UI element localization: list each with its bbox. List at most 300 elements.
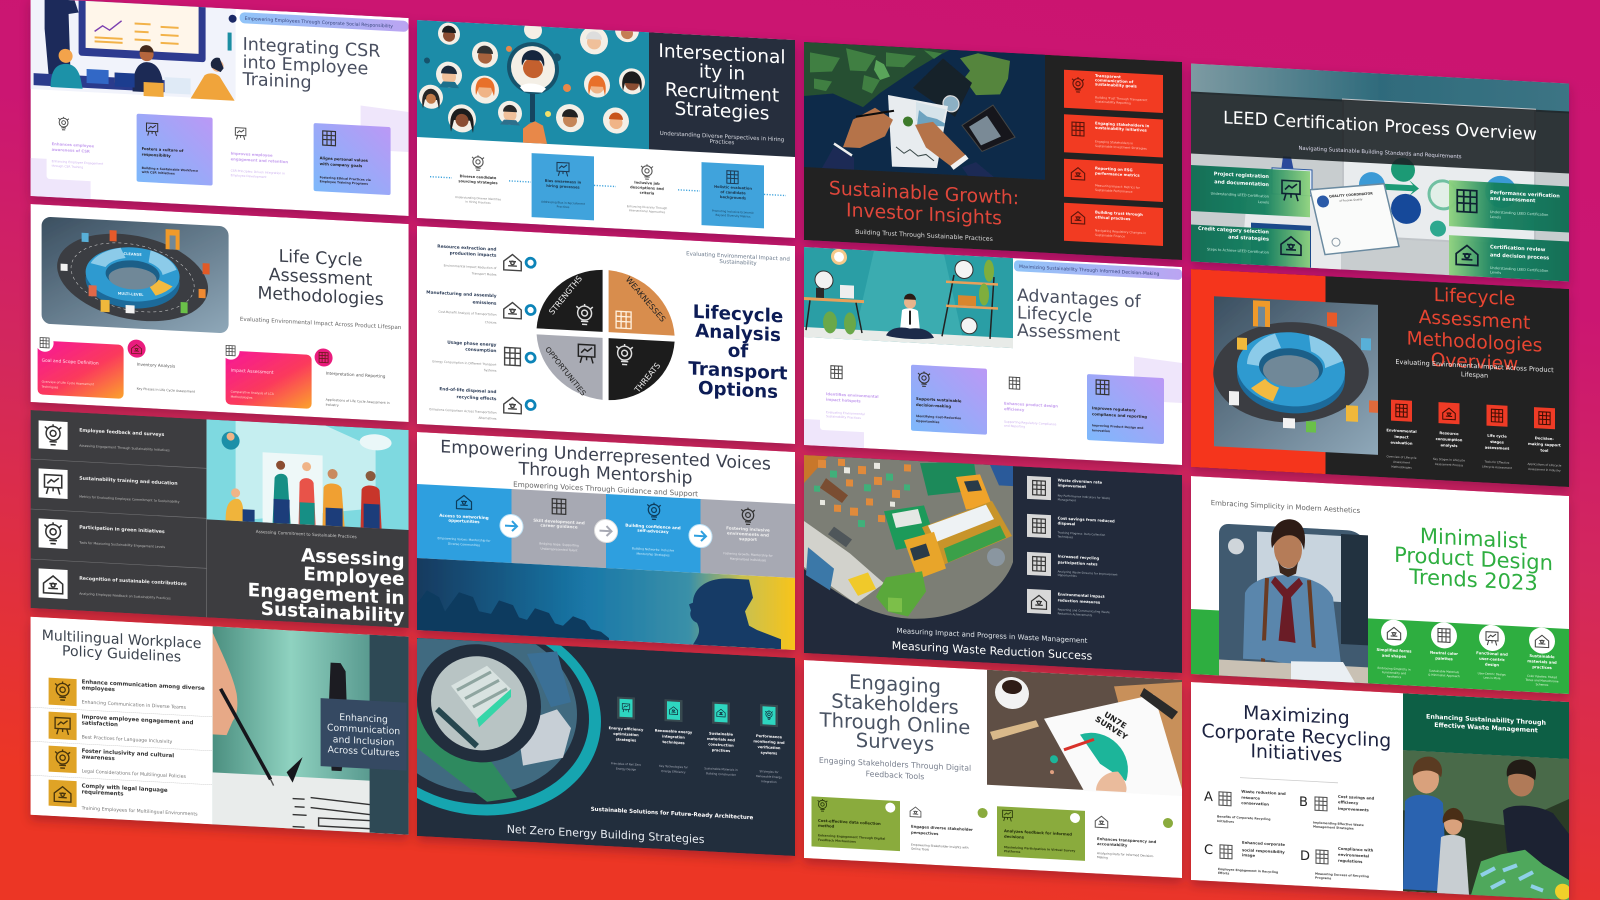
card: hotspots: Evaluating Environmental xyxy=(826,410,865,416)
title: Transport xyxy=(688,358,788,385)
metric: diversion xyxy=(1027,476,1110,504)
title panel xyxy=(649,32,795,157)
strategy: materials: Sustainable xyxy=(709,731,733,737)
card: impact xyxy=(222,341,312,409)
card: transparent communication xyxy=(1064,70,1163,113)
card: responsibility: Building a Sustainable Workforce xyxy=(142,166,198,173)
image: diverse faces xyxy=(417,7,649,149)
title: Employee xyxy=(303,564,405,590)
item: decision: Decision- xyxy=(1535,436,1554,441)
item D: Measuring Success of Recycling xyxy=(1315,872,1369,878)
card: interpretation: Applications of Life Cycle Assessment in xyxy=(326,398,390,405)
illustration: meditating man xyxy=(804,247,1013,348)
subtitle: Sustainable Solutions for Future-Ready Architecture xyxy=(591,807,754,821)
title: Sustainability xyxy=(261,599,405,627)
item: resource: consumption xyxy=(1436,437,1463,442)
metric: diversion: improvement xyxy=(1058,482,1086,489)
trend: sustainable: Tones and Monochrome xyxy=(1524,678,1559,683)
card: values: Employee Training Programs xyxy=(320,179,368,186)
item: end of life: Alternatives xyxy=(478,416,497,421)
step: sourcing xyxy=(455,154,502,205)
subtitle: Empowering Voices Through Guidance and Support xyxy=(513,480,698,498)
step: bias: Bias awareness in xyxy=(545,179,582,185)
title band xyxy=(1191,92,1569,174)
card: data collection: Cost-effective data collection xyxy=(818,818,881,826)
strategy: performance: systems xyxy=(761,751,777,756)
step: holistic: Beyond Diversity Metrics xyxy=(716,213,751,219)
metric: recycling: Analyzing Waste Streams for Improvement xyxy=(1058,569,1118,577)
step: inclusive: criteria xyxy=(640,191,655,196)
item: communication xyxy=(48,678,204,709)
item C: social responsibility xyxy=(1242,847,1285,854)
card: awareness: Enhances employee xyxy=(52,141,94,148)
step: inclusive xyxy=(627,163,667,214)
item B: B xyxy=(1299,795,1308,810)
row: recognition: Recognition of sustainable contributions xyxy=(79,576,187,587)
card: credit category xyxy=(1191,224,1310,268)
item: usage: Energy Consumption in Different Transport xyxy=(432,359,497,367)
card: decisions: decision-making xyxy=(916,402,951,409)
trend: functional: User-Centric Design: xyxy=(1478,671,1506,677)
callout: Enhancing xyxy=(339,712,388,726)
card: design xyxy=(1004,377,1058,430)
title: Measuring Waste Reduction Success xyxy=(892,639,1093,663)
header pill: Empowering Employees Through Corporate Social Responsibility xyxy=(245,16,393,30)
item: manufacturing: Choices xyxy=(485,320,497,325)
item A: resource xyxy=(1241,795,1260,801)
arrow one xyxy=(500,514,523,538)
metric: cost savings: disposal xyxy=(1058,520,1075,526)
image: isometric waste yard xyxy=(804,453,1013,624)
strategy: performance xyxy=(753,704,785,785)
card: data collection: method xyxy=(818,823,835,829)
item A: Initiatives xyxy=(1217,819,1234,824)
item: communication: Enhance communication among diverse xyxy=(82,679,205,692)
card: awareness xyxy=(52,116,104,170)
card: perspectives xyxy=(910,804,988,855)
item B: Implementing Effective Waste xyxy=(1313,820,1364,827)
metric: cost savings: Tracking Progress: Data Collection xyxy=(1057,530,1105,537)
slide: Engaging Stakeholders Through Online Surveys xyxy=(804,660,1184,878)
item D: regulations xyxy=(1338,858,1363,864)
step: sourcing: sourcing strategies xyxy=(458,179,498,185)
item: decision: tool xyxy=(1540,449,1548,453)
step: bias: Addressing Bias in Recruitment xyxy=(541,200,586,206)
item: usage: Systems xyxy=(484,368,497,373)
header panel: Effective Waste Management xyxy=(1434,722,1538,734)
image: circular building view xyxy=(357,609,601,822)
title: Assessment xyxy=(1017,321,1120,346)
band step: confidence: Building Networks: Inclusive xyxy=(632,546,674,553)
trend: color: palettes xyxy=(1435,655,1454,661)
item: manufacturing: Manufacturing and assembly xyxy=(426,289,497,299)
step: holistic xyxy=(702,162,764,228)
subtitle: Feedback Tools xyxy=(866,769,924,781)
trend: color: Sustainable Materials xyxy=(1429,669,1460,674)
band step: skills: Skill development and xyxy=(533,518,585,525)
metric: diversion: Waste diversion rate xyxy=(1058,477,1103,485)
title panel: Strategies xyxy=(675,99,769,125)
row: feedback xyxy=(38,420,170,452)
metric: impact xyxy=(1027,589,1110,618)
dot connectors xyxy=(430,177,786,196)
card: credit category: and strategies xyxy=(1228,234,1269,243)
card: compliance: Innovation xyxy=(1092,428,1110,433)
title panel: ity in xyxy=(699,61,745,85)
card: impact: Comparative Analysis of LCA xyxy=(231,390,275,396)
card: hotspots: Sustainability Practices xyxy=(826,414,861,420)
title: Training xyxy=(242,70,312,93)
image: survey on desk: SURVEY xyxy=(1093,715,1129,742)
item: resource extraction: Resource extraction and xyxy=(437,244,496,253)
strategy: renewable: Energy Efficiency xyxy=(661,769,686,774)
strategy: materials: materials and xyxy=(707,737,735,742)
title: Overview xyxy=(1431,350,1518,375)
item: manufacturing xyxy=(426,289,535,327)
card: engagement: Improves employee xyxy=(231,151,273,158)
item A: conservation xyxy=(1241,800,1269,807)
step: inclusive: Intersectional Approaches xyxy=(629,208,666,214)
title: Engagement in xyxy=(248,580,405,609)
card: perspectives: Engages diverse stakeholder xyxy=(911,824,973,832)
item A: A xyxy=(1204,790,1213,805)
item: manufacturing: Cost-Benefit Analysis of Transportation xyxy=(438,310,497,317)
arrow two xyxy=(594,519,618,543)
item D: D xyxy=(1300,849,1310,864)
band step: inclusive: support xyxy=(739,536,757,542)
item: life cycle stages: Tools for Effective xyxy=(1484,460,1510,465)
title: Assessing xyxy=(301,545,405,572)
strategy: materials: Sustainable Materials in xyxy=(704,766,738,772)
card: transparent communication: sustainability goals xyxy=(1095,81,1138,89)
band step: networking: Access to networking xyxy=(439,513,489,520)
card: interpretation: Industry xyxy=(326,403,339,407)
title: Through Online xyxy=(819,708,970,739)
card: design: efficiency xyxy=(1004,406,1025,412)
step: inclusive: Enhancing Diversity Through xyxy=(627,204,667,210)
card: registration: Understanding LEED Certification xyxy=(1211,192,1269,199)
title: Lifecycle xyxy=(1434,285,1515,310)
image: ring road: MULTI-LEVEL xyxy=(118,292,144,297)
card: perspectives: Online Tools xyxy=(911,847,929,852)
image: ring road xyxy=(42,217,229,335)
trend: functional: user-centric xyxy=(1479,656,1505,662)
item: decision xyxy=(1527,407,1562,473)
item: resource: Resource xyxy=(1439,431,1459,436)
card: goal: Overview of Life Cycle Assessment xyxy=(42,380,95,386)
item: resource: analysis xyxy=(1441,443,1458,448)
card: engaging stakeholders xyxy=(1064,114,1163,158)
card: interpretation xyxy=(315,348,390,410)
metric: cost savings: Techniques xyxy=(1057,534,1074,539)
slide: Intersectionality in Recruitment Strategies xyxy=(417,7,795,238)
image: family recycling xyxy=(1403,750,1571,900)
image: designer at desk xyxy=(1219,515,1368,683)
image: survey on desk: UN7E xyxy=(1103,710,1128,731)
slide: Lifecycle Assessment Methodologies Overview xyxy=(1191,269,1569,487)
item: environmental: Overview of Lifecycle xyxy=(1387,454,1417,460)
trend: sustainable: practices xyxy=(1532,664,1553,670)
image: silhouettes xyxy=(417,558,795,654)
card: certification review: Certification review xyxy=(1490,244,1546,253)
strategy: performance: verification xyxy=(758,745,781,750)
card: building trust xyxy=(1064,203,1163,246)
row: recognition: Analyzing Employee Feedback on Sustainability Practices xyxy=(79,592,171,600)
item: decision: Assessment in Industry xyxy=(1528,467,1561,473)
header panel xyxy=(1403,693,1569,759)
trend: sustainable xyxy=(1524,627,1559,687)
card: reporting: Sustainable Performance xyxy=(1095,188,1133,194)
header pill xyxy=(240,12,409,32)
card: decisions: Opportunities xyxy=(916,419,940,424)
arrow three xyxy=(689,524,712,548)
item: legal: Comply with legal language xyxy=(82,783,168,794)
quadrant: threats: THREATS xyxy=(632,361,662,395)
trend: functional xyxy=(1476,624,1508,681)
step: holistic: of candidate xyxy=(720,190,746,195)
SWOT quadrant chart xyxy=(537,266,675,404)
item: environmental: Methodologies xyxy=(1391,465,1412,470)
band step: skills: Bridging Gaps: Supporting xyxy=(539,541,579,548)
card: transparent communication: communication of xyxy=(1095,77,1134,84)
card: analyzes feedback: Maximizing Participation in Virtual Survey xyxy=(1004,845,1075,853)
item: manufacturing: emissions xyxy=(472,299,497,307)
band step: networking xyxy=(417,484,512,563)
band step: skills: Underrepresented Talent xyxy=(540,547,578,553)
metric: impact: Environmental impact xyxy=(1058,591,1105,599)
item: engagement xyxy=(49,712,193,746)
row: initiatives: Participation in green initiatives xyxy=(79,525,165,535)
subtitle: Assessing Commitment to Sustainable Practices xyxy=(256,529,357,539)
strategy: energy efficiency xyxy=(609,696,644,772)
trend: functional: Less is More xyxy=(1483,676,1501,680)
card: hotspots: Identifies environmental xyxy=(826,391,879,399)
item: decision: Applications of Lifecycle xyxy=(1527,462,1562,468)
slide: Minimalist Product Design Trends 2023 xyxy=(1191,476,1569,694)
trend: forms: Functionality and xyxy=(1382,670,1406,675)
image: survey on desk xyxy=(987,670,1184,796)
card: data collection: Enhancing Engagement Through Digital xyxy=(818,833,885,841)
item C xyxy=(1204,838,1285,879)
title panel: Understanding Diverse Perspectives in Hiring xyxy=(660,131,784,143)
card: data collection xyxy=(812,796,900,851)
item C: Efforts xyxy=(1218,871,1229,876)
row: feedback: Employee feedback and surveys xyxy=(79,428,164,438)
card: goal xyxy=(36,333,124,399)
card: decisions: Supports sustainable xyxy=(916,396,962,403)
slide: Advantages of Lifecycle Assessment xyxy=(804,247,1182,465)
band step: networking: Empowering Voices: Mentorship for xyxy=(437,536,491,543)
item C: C xyxy=(1204,843,1213,858)
item: life cycle stages: Lifecycle Assessment xyxy=(1482,464,1513,470)
band step: confidence xyxy=(606,494,700,573)
item: usage xyxy=(432,339,535,375)
card: certification review xyxy=(1449,235,1569,282)
title: Net Zero Energy Building Strategies xyxy=(507,823,705,846)
item C: image xyxy=(1242,852,1256,858)
item: legal: Training Employees for Multilingual Environments xyxy=(81,805,198,818)
row: initiatives: Tools for Measuring Sustainability Engagement Levels xyxy=(78,541,165,549)
card: data collection: Feedback Mechanisms xyxy=(818,838,856,844)
card: inventory xyxy=(128,339,196,394)
card: transparency: accountability xyxy=(1097,841,1128,848)
card: transparency: Analyzing Data for Informed Decision- xyxy=(1097,851,1154,858)
row: initiatives xyxy=(38,518,165,549)
card: transparent communication: Transparent xyxy=(1095,73,1121,79)
card: perspectives: Empowering Stakeholder Insights with xyxy=(911,843,969,850)
slide: Measuring Waste Reduction Success xyxy=(804,453,1182,673)
title band: LEED Certification Process Overview xyxy=(1223,108,1537,145)
strategy: performance: Renewable Energy xyxy=(756,774,782,779)
band step: confidence: self-advocacy xyxy=(637,528,669,534)
trend: forms xyxy=(1376,619,1412,680)
metric: recycling: Opportunities xyxy=(1058,573,1077,578)
title: Integrating CSR xyxy=(243,35,380,62)
strategy: renewable: Key Technologies for xyxy=(659,764,689,769)
card: engagement: CSR Principles: Driven Integration in xyxy=(231,169,285,175)
card: engagement: Employee Development xyxy=(231,173,267,179)
item: engagement: satisfaction xyxy=(82,720,118,728)
row: feedback: Assessing Engagement Through Sustainability Initiatives xyxy=(79,444,170,452)
metric: cost savings xyxy=(1027,514,1115,541)
item: inclusivity xyxy=(49,746,186,780)
item: life cycle stages xyxy=(1482,404,1513,470)
image: hand and pen xyxy=(213,626,409,835)
title: Investor Insights xyxy=(846,200,1002,229)
card: analyzes feedback: decisions xyxy=(1004,834,1025,840)
subtitle: Evaluating Environmental Impact and xyxy=(686,251,790,263)
step: inclusive: descriptions and xyxy=(630,185,664,191)
band step: skills xyxy=(512,489,606,568)
image: flipped ring road xyxy=(1208,296,1378,455)
item: resource: Key Stages in Lifecycle xyxy=(1433,457,1465,463)
quadrant: weaknesses: WEAKNESSES xyxy=(624,275,667,324)
item: usage: Usage phase energy xyxy=(447,340,497,348)
card: registration xyxy=(1191,165,1310,217)
item D: environmental xyxy=(1338,852,1369,858)
band step: inclusive: Marginalized Individuals xyxy=(730,557,767,563)
strategy: materials: Building Construction xyxy=(706,771,736,777)
item A: Benefits of Corporate Recycling xyxy=(1217,814,1271,821)
item: engagement: Best Practices for Language Inclusivity xyxy=(82,734,172,745)
title: Product Design xyxy=(1394,542,1553,575)
card: transparency: Enhances transparency and xyxy=(1097,836,1157,844)
metric: recycling: participation rates xyxy=(1058,559,1098,567)
item: resource: Assessment Process xyxy=(1435,462,1464,467)
title panel: Recruitment xyxy=(665,80,779,107)
item: environmental xyxy=(1386,399,1417,470)
slide: Empowering Underrepresented Voices xyxy=(417,432,795,654)
trend: forms: and shapes xyxy=(1382,653,1407,659)
card: impact: Methodologies xyxy=(231,395,253,400)
item: life cycle stages: assessment xyxy=(1485,446,1509,451)
title: Policy Guidelines xyxy=(62,643,181,666)
item: legal xyxy=(49,780,198,818)
trend: sustainable: Sustainable xyxy=(1529,653,1555,659)
item: life cycle stages: Life cycle xyxy=(1487,434,1507,439)
title: Assessment xyxy=(269,265,373,291)
trend: color xyxy=(1428,622,1460,678)
title: Analysis xyxy=(695,321,781,346)
card: transparent communication: Sustainability Reporting xyxy=(1095,99,1131,105)
title: Empowering Underrepresented Voices xyxy=(440,437,771,475)
step: holistic: backgrounds xyxy=(720,195,746,200)
band step: inclusive xyxy=(700,499,795,578)
trend: sustainable: materials and xyxy=(1527,658,1557,665)
trend: sustainable: Schemes xyxy=(1536,682,1549,687)
callout: and Inclusion xyxy=(333,734,395,748)
subtitle: Evaluating Environmental Impact Across Product xyxy=(1395,358,1554,374)
trend: forms: Embracing Simplicity in xyxy=(1378,666,1411,672)
title: Lifecycle xyxy=(1017,303,1092,327)
title: Corporate Recycling xyxy=(1202,721,1391,752)
trend: functional: Functional and xyxy=(1476,650,1508,657)
card: reporting xyxy=(1064,159,1163,202)
slide: Life Cycle Assessment Methodologies xyxy=(31,204,409,422)
item: decision: making support xyxy=(1528,442,1561,448)
trend: color: & Minimalist Approach xyxy=(1428,673,1460,678)
item: inclusivity: Legal Considerations for Multilingual Policies xyxy=(82,768,186,780)
item A: Waste reduction and xyxy=(1241,789,1286,796)
title: Methodologies xyxy=(258,284,384,310)
header pill xyxy=(1014,260,1182,280)
card: inventory: Key Phases in Life Cycle Assessment xyxy=(137,387,196,394)
item B: efficiency xyxy=(1338,799,1359,805)
card: transparency xyxy=(1095,814,1173,863)
item A xyxy=(1204,787,1286,827)
item: environmental: Assessment xyxy=(1393,460,1411,465)
step: sourcing: Diverse candidate xyxy=(460,174,497,180)
card: responsibility xyxy=(137,114,213,186)
card: certification review: Understanding LEED Certification xyxy=(1490,266,1548,273)
title: Methodologies xyxy=(1407,328,1542,357)
item: engagement: Improve employee engagement and xyxy=(82,714,193,726)
item: end of life: End-of-life disposal and xyxy=(439,386,496,395)
header pill: Maximizing Sustainability Through Informed Decision-Making xyxy=(1019,264,1160,277)
strategy: renewable: Renewable energy xyxy=(655,729,693,735)
callout: Across Cultures xyxy=(328,744,400,759)
card: engagement xyxy=(231,127,288,180)
card: hotspots xyxy=(826,365,879,421)
subtitle: Measuring Impact and Progress in Waste Management xyxy=(897,627,1088,645)
item D: Compliance with xyxy=(1338,846,1374,853)
step: bias: hiring processes xyxy=(546,184,580,190)
card: analyzes feedback xyxy=(997,806,1085,861)
slide: Multilingual Workplace Policy Guidelines xyxy=(31,617,409,835)
card: compliance: Improves regulatory xyxy=(1092,405,1136,413)
card: design: Enhances product design xyxy=(1004,401,1058,408)
card: credit category: Steps to Achieve LEED Certification xyxy=(1207,247,1269,255)
card: performance verification: Understanding LEED Certification xyxy=(1490,210,1548,217)
card: certification review: Levels xyxy=(1490,270,1501,275)
item D: Programs xyxy=(1315,876,1332,880)
item: resource extraction: Transport Modes xyxy=(471,271,497,277)
strategy: performance: Integration xyxy=(761,779,777,784)
card: engaging stakeholders: Engaging stakeholders in xyxy=(1095,120,1150,128)
trend: sustainable: Color Palettes: Muted xyxy=(1527,674,1557,679)
title: Minimalist xyxy=(1420,523,1527,554)
item: environmental: evaluation xyxy=(1391,441,1413,446)
subtitle: Evaluating Environmental Impact Across Product Lifespan xyxy=(240,317,402,331)
card: perspectives: perspectives xyxy=(911,830,939,836)
card: registration: Project registration xyxy=(1214,171,1269,180)
item: inclusivity: Foster inclusivity and cultural xyxy=(82,748,174,759)
quadrant: strengths: STRENGTHS xyxy=(547,274,584,317)
card: responsibility: with CSR Initiatives xyxy=(142,170,175,176)
item: legal: requirements xyxy=(82,789,124,798)
metric: diversion: Key Performance Indicators for Waste xyxy=(1058,493,1110,500)
subtitle: Lifespan xyxy=(1461,370,1488,380)
